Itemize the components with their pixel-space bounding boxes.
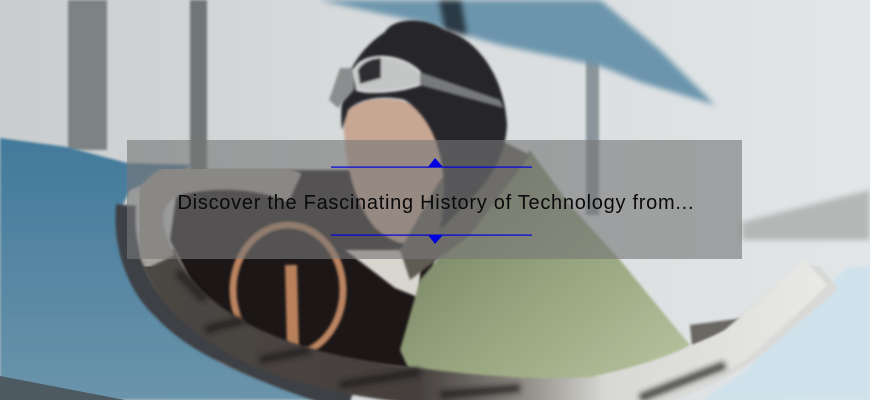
- flying goggles: [329, 57, 504, 108]
- cockpit flange and rim left: [125, 205, 350, 400]
- fuselage panel seam: [0, 376, 125, 400]
- title text: Discover the Fascinating History of Technology from...: [178, 192, 694, 214]
- wing struts: [68, 0, 599, 215]
- upper coaming pad: [147, 174, 295, 262]
- neck and collar: [400, 140, 530, 280]
- dark gap behind coaming: [690, 318, 743, 345]
- pale blue fuselage right: [703, 266, 870, 400]
- pilot jacket: [400, 150, 690, 390]
- blue upper wing: [318, 0, 715, 105]
- pale background in cockpit: [345, 250, 420, 298]
- pilot face: [344, 99, 452, 244]
- blue fuselage left: [0, 138, 335, 400]
- steering wheel: [233, 225, 343, 355]
- top ornament line with up triangle: [331, 158, 532, 168]
- bottom ornament line with down triangle: [331, 234, 532, 244]
- translucent title panel: [127, 140, 742, 259]
- padded leather coaming: [158, 255, 815, 396]
- leather flying helmet: [341, 20, 507, 230]
- distant dark band: [742, 190, 870, 240]
- cockpit interior: [170, 170, 450, 372]
- coaming creases: [178, 272, 725, 398]
- pale flange on right of cockpit: [600, 272, 825, 398]
